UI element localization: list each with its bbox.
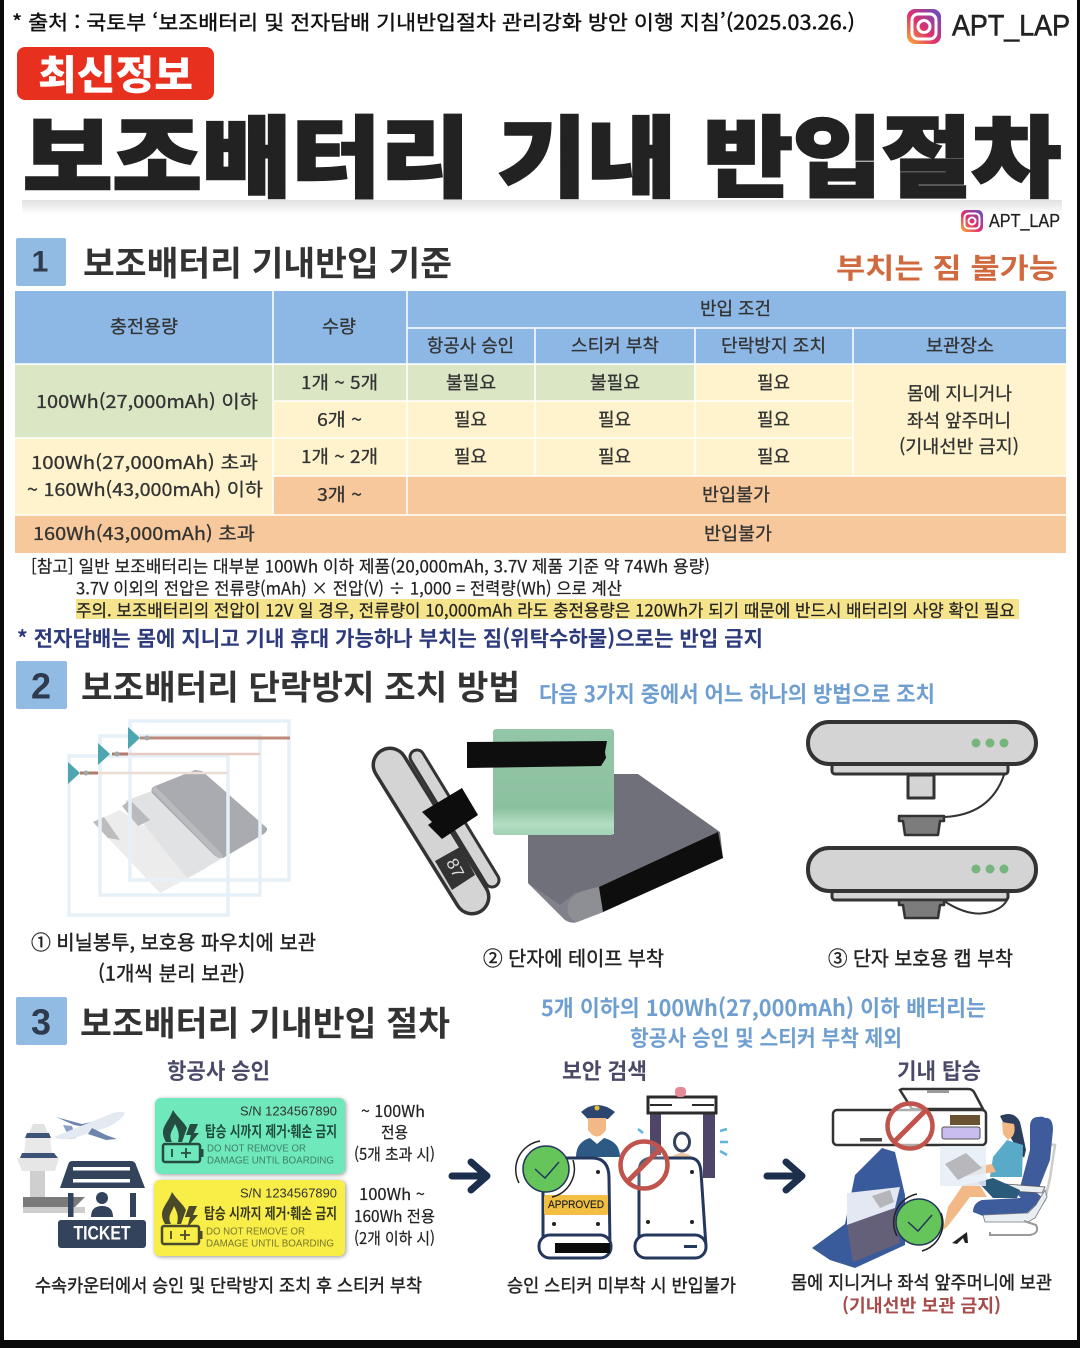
caption 2: ② 단자에 테이프 부착 [483, 942, 664, 972]
table: carry-on criteria: ~ 160Wh(43,000mAh) 이하 [27, 476, 263, 502]
sticker labels: ~ 100Wh [361, 1098, 425, 1122]
table: carry-on criteria: 필요 [598, 443, 631, 469]
sticker: yellow: 탑승 시까지 제거·훼손 금지 [204, 1202, 337, 1224]
sticker labels [354, 1098, 435, 1249]
step caption: boarding [791, 1269, 1052, 1318]
section 1 number [16, 238, 66, 286]
table: carry-on criteria: 좌석 앞주머니 [907, 407, 1011, 433]
section 1 heading: 보조배터리 기내반입 기준 [83, 236, 452, 286]
sticker: green: DO NOT REMOVE OR [207, 1144, 306, 1154]
section 3 number [16, 997, 67, 1045]
table: carry-on criteria: 몸에 지니거나 [907, 380, 1012, 406]
table: carry-on criteria: 1개 ~ 5개 [301, 369, 378, 395]
no checked baggage notice: 부치는 짐 불가능 [836, 247, 1058, 287]
instagram handle small: APT_LAP [989, 211, 1060, 232]
table: carry-on criteria: 필요 [454, 443, 487, 469]
table: carry-on criteria: 3개 ~ [317, 481, 362, 507]
instagram handle top [907, 9, 1070, 44]
step heading: boarding: 기내 탑승 [897, 1054, 981, 1086]
table: carry-on criteria: 스티커 부착 [571, 332, 659, 358]
sticker labels: 전용 [381, 1119, 408, 1143]
table: carry-on criteria: 단락방지 조치 [721, 332, 826, 358]
table: carry-on criteria: 필요 [454, 406, 487, 432]
table: carry-on criteria: 160Wh(43,000mAh) 초과 [33, 520, 255, 546]
sticker: yellow: DAMAGE UNTIL BOARDING [206, 1238, 334, 1250]
step caption: boarding: (기내선반 보관 금지) [842, 1292, 1001, 1318]
exemption note [541, 991, 986, 1053]
table: carry-on criteria: 항공사 승인 [427, 332, 514, 358]
table: carry-on criteria: 수량 [322, 313, 356, 339]
table: carry-on criteria: 반입불가 [702, 481, 770, 507]
sticker: green: DAMAGE UNTIL BOARDING [207, 1156, 334, 1166]
table: carry-on criteria: 충전용량 [110, 313, 178, 339]
illustration: security check: APPROVED [548, 1199, 604, 1211]
reference notes: 3.7V 이외의 전압은 전류량(mAh) × 전압(V) ÷ 1,000 = 전력량(Wh) 으로 계산 [76, 574, 622, 600]
table: carry-on criteria: 불필요 [590, 369, 640, 395]
step caption: counter: 수속카운터에서 승인 및 단락방지 조치 후 스티커 부착 [35, 1272, 422, 1298]
reference notes: 주의. 보조배터리의 전압이 12V 일 경우, 전류량이 10,000mAh 라도 충전용량은 120Wh가 되기 때문에 반드시 배터리의 사양 확인 필요 [76, 596, 1015, 622]
illustration: tape on terminals: 87 [442, 855, 468, 881]
illustration: terminal protective caps [808, 722, 1036, 918]
sticker labels: 100Wh ~ [359, 1181, 425, 1205]
section 2 number [16, 661, 67, 709]
instagram handle top: APT_LAP [952, 10, 1070, 42]
e-cigarette note: * 전자담배는 몸에 지니고 기내 휴대 가능하나 부치는 짐(위탁수하물)으로는 반입 금지 [17, 623, 763, 653]
section 2 subheading: 다음 3가지 중에서 어느 하나의 방법으로 조치 [539, 677, 935, 709]
main title: 보조배터리 기내 반입절차 [23, 88, 1061, 216]
sticker: green: S/N 1234567890 [240, 1104, 337, 1118]
illustration: tape on terminals [390, 729, 723, 923]
exemption note: 5개 이하의 100Wh(27,000mAh) 이하 배터리는 [541, 991, 986, 1023]
arrow 2 [767, 1162, 802, 1190]
table: carry-on criteria: 100Wh(27,000mAh) 초과 [31, 449, 258, 475]
icon: airport tower and ticket counter [17, 1112, 146, 1248]
sticker: yellow: S/N 1234567890 [240, 1186, 337, 1200]
table: carry-on criteria: 6개 ~ [317, 406, 362, 432]
table: carry-on criteria: 불필요 [446, 369, 496, 395]
sticker: yellow: DO NOT REMOVE OR [206, 1226, 305, 1238]
section 2 heading: 보조배터리 단락방지 조치 방법 [81, 660, 520, 710]
illustration: boarding [812, 1089, 1055, 1268]
section 1 number: 1 [32, 246, 48, 278]
sticker labels: (5개 초과 시) [354, 1141, 435, 1165]
sticker: yellow [154, 1180, 345, 1256]
table: carry-on criteria: 반입불가 [704, 520, 772, 546]
table: carry-on criteria: 필요 [598, 406, 631, 432]
sticker: green: 탑승 시까지 제거·훼손 금지 [205, 1120, 337, 1142]
instagram handle small [961, 210, 1060, 232]
table: carry-on criteria: 필요 [757, 443, 790, 469]
step heading: airline approval: 항공사 승인 [167, 1054, 270, 1086]
table: carry-on criteria: 필요 [757, 369, 790, 395]
section 3 number: 3 [31, 1002, 51, 1042]
reference notes [31, 552, 1019, 622]
step caption: security: 승인 스티커 미부착 시 반입불가 [507, 1272, 736, 1298]
illustration: security check [516, 1087, 728, 1258]
step caption: boarding: 몸에 지니거나 좌석 앞주머니에 보관 [791, 1269, 1052, 1295]
caption 3: ③ 단자 보호용 캡 부착 [828, 942, 1013, 972]
step heading: security check: 보안 검색 [562, 1054, 647, 1086]
table: carry-on criteria: (기내선반 금지) [899, 433, 1019, 459]
section 3 heading: 보조배터리 기내반입 절차 [80, 996, 450, 1046]
badge: latest info: 최신정보 [38, 43, 193, 101]
table: carry-on criteria [15, 291, 1066, 553]
sticker labels: (2개 이하 시) [354, 1225, 435, 1249]
table: carry-on criteria: 필요 [757, 406, 790, 432]
table: carry-on criteria: 보관장소 [926, 332, 994, 358]
exemption note: 항공사 승인 및 스티커 부착 제외 [630, 1021, 902, 1053]
arrow 1 [452, 1162, 487, 1190]
caption 1: (1개씩 분리 보관) [98, 958, 245, 986]
source line: * 출처 : 국토부 ‘보조배터리 및 전자담배 기내반입절차 관리강화 방안 이행 지침’(2025.03.26.) [12, 6, 855, 36]
table: carry-on criteria: 1개 ~ 2개 [301, 443, 378, 469]
sticker labels: 160Wh 전용 [354, 1203, 435, 1227]
table: carry-on criteria: 100Wh(27,000mAh) 이하 [36, 388, 258, 414]
sticker: green [155, 1098, 345, 1174]
icon: airport tower and ticket counter: TICKET [74, 1224, 131, 1244]
reference notes: [참고] 일반 보조배터리는 대부분 100Wh 이하 제품(20,000mAh, 3.7V 제품 기준 약 74Wh 용량) [31, 552, 710, 578]
table: carry-on criteria: 반입 조건 [700, 295, 771, 321]
illustration: batteries in plastic bags [68, 721, 290, 915]
caption 1: ① 비닐봉투, 보호용 파우치에 보관 [31, 926, 316, 956]
section 2 number: 2 [31, 666, 51, 706]
caption 1 [31, 926, 316, 986]
